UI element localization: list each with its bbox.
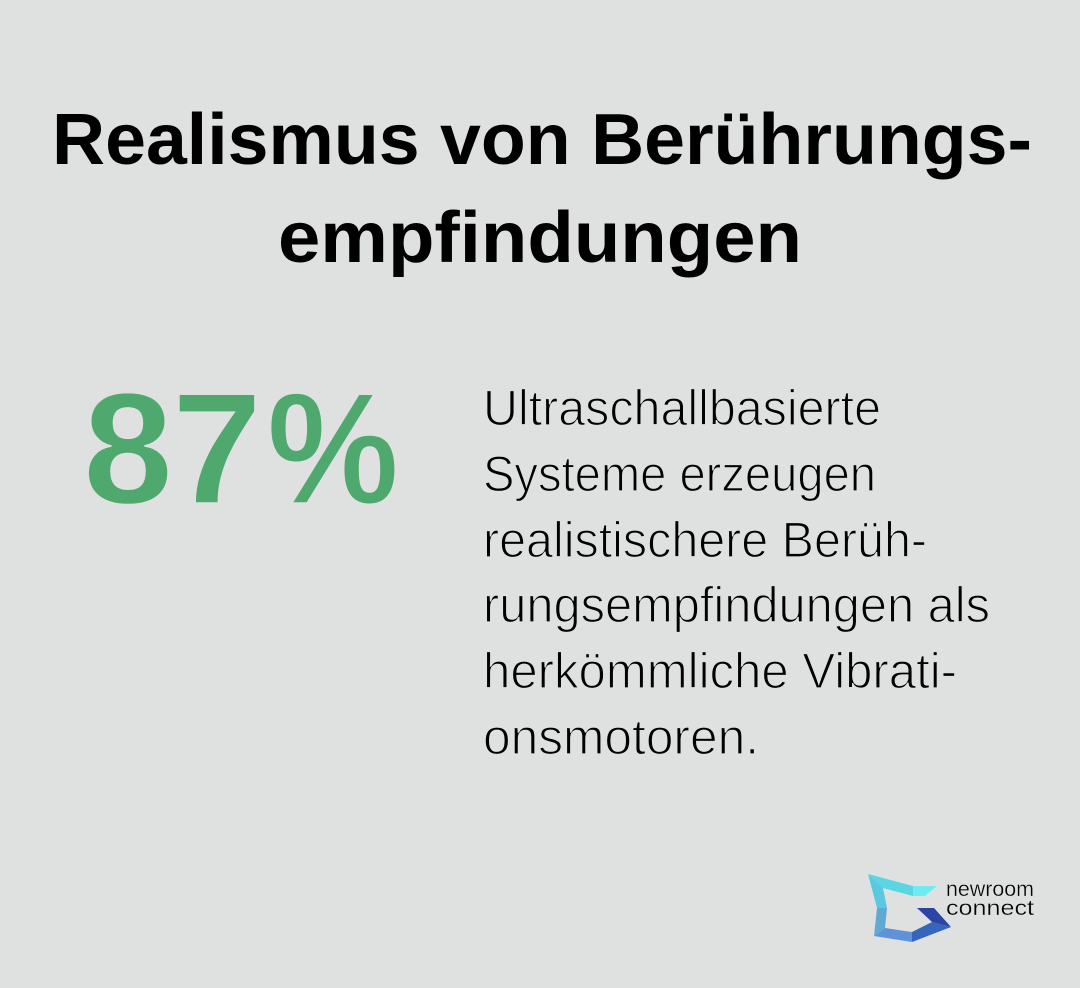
- title: [52, 100, 1032, 278]
- statistic: 87%: 8: [83, 361, 173, 537]
- description text: Ultraschallbasierte: [483, 380, 881, 436]
- logo wordmark: newroom: [946, 878, 1034, 901]
- description text: [483, 380, 990, 765]
- title: empfindungen: [278, 198, 802, 278]
- description text: onsmotoren.: [483, 709, 759, 765]
- description text: rungsempfindungen als: [483, 577, 990, 633]
- logo: newroom connect: [868, 874, 1034, 942]
- description text: realistischere Berüh-: [483, 512, 927, 568]
- description text: herkömmliche Vibrati-: [483, 643, 957, 699]
- description text: Systeme erzeugen: [483, 446, 876, 502]
- title: Realismus von Berührungs-: [52, 100, 1032, 180]
- statistic: 87%: 7: [172, 361, 262, 537]
- logo icon: [868, 874, 951, 942]
- logo wordmark: connect: [946, 897, 1034, 920]
- logo wordmark: [946, 878, 1034, 920]
- statistic: 87%: [83, 361, 399, 537]
- statistic: 87%: %: [267, 361, 399, 537]
